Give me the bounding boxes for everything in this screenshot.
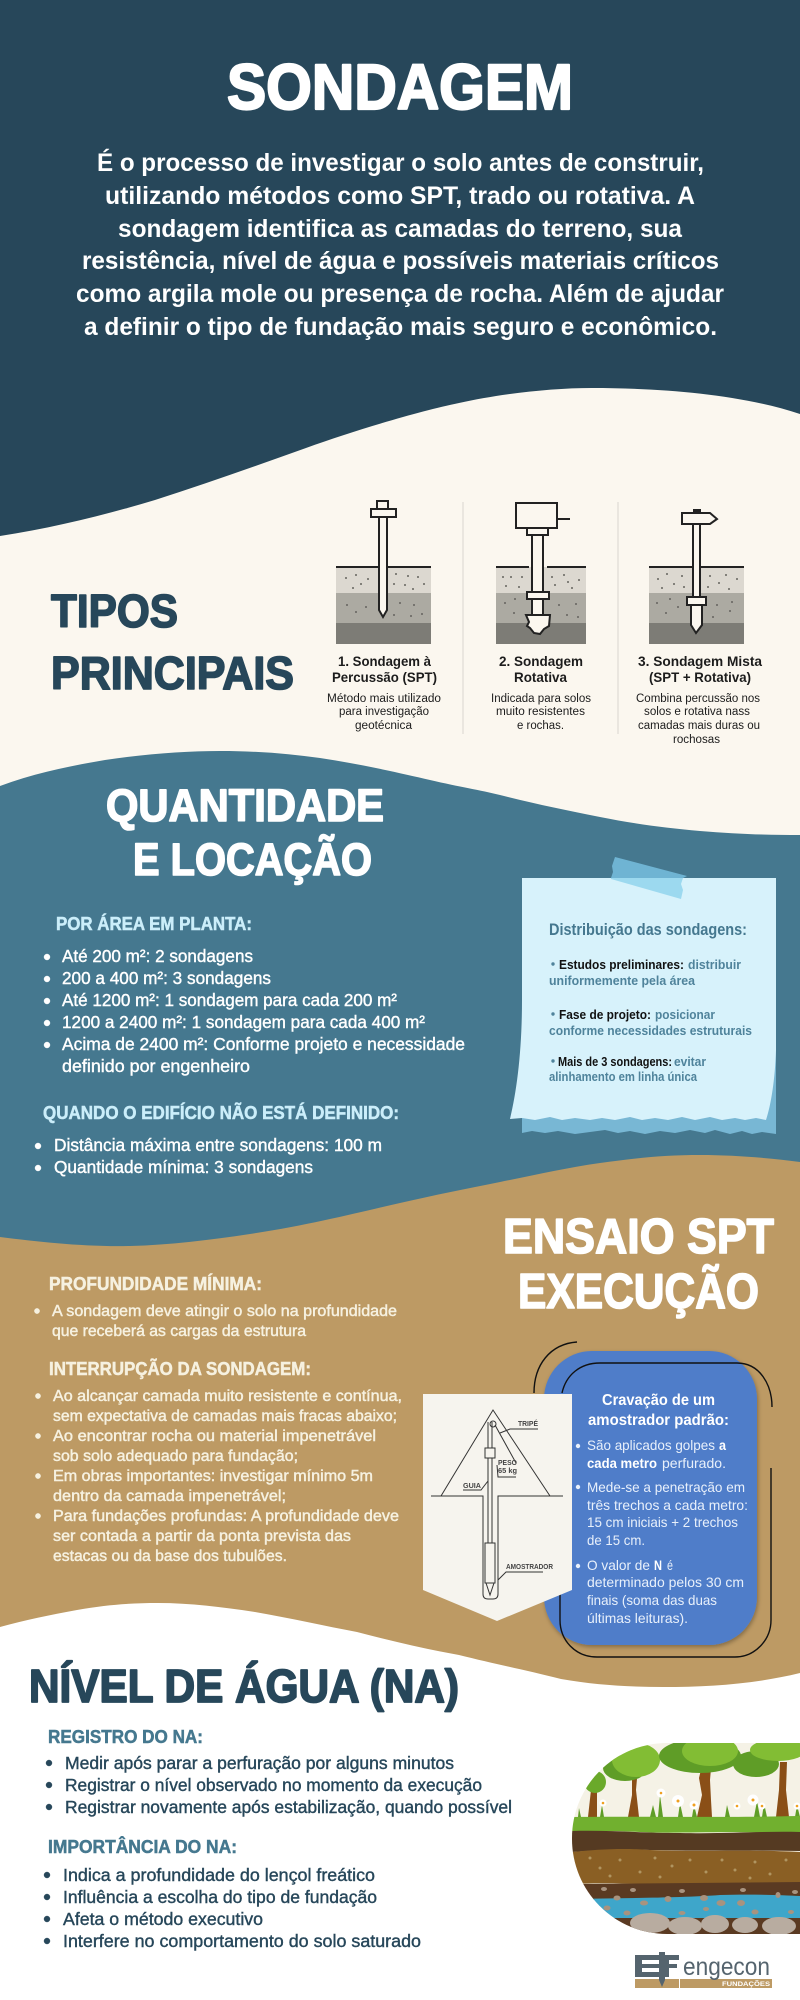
text: sondagem mista: rochosas [673,734,720,746]
list: interrupcao da sondagem: Ao encontrar rocha ou material impenetrável [53,1428,376,1445]
list: registro do na: Registrar o nível observado no momento da execução [65,1775,482,1795]
note text: uniformemente pela área [549,973,696,988]
intro text block: utilizando métodos como SPT, trado ou rotativa. A [105,182,695,210]
list: edificio nao definido [35,1135,382,1177]
list: por area em planta: Até 1200 m²: 1 sondagem para cada 200 m² [62,990,397,1010]
list: profundidade minima: A sondagem deve atingir o solo na profundidade [52,1303,397,1320]
heading: profundidade minima: PROFUNDIDADE MÍNIMA: [49,1273,262,1294]
heading: ensaio spt execucao: EXECUÇÃO [518,1265,759,1319]
list: edificio nao definido: Distância máxima entre sondagens: 100 m [54,1135,382,1155]
card list: é [667,1557,673,1573]
list: importancia do na: Indica a profundidade do lençol freático [63,1865,375,1885]
text: sondagem mista: solos e rotativa nass [644,706,750,718]
card list: N [654,1557,662,1573]
logo tagline: FUNDAÇÕES [722,1979,771,1988]
note text [549,957,752,1084]
heading: nivel de agua: NÍVEL DE ÁGUA (NA) [29,1660,459,1712]
heading: ensaio spt execucao: ENSAIO SPT [503,1210,774,1264]
card list: perfurado. [662,1455,726,1471]
text: sondagem mista: 3. Sondagem Mista [638,653,762,669]
card list: 15 cm iniciais + 2 trechos [587,1514,738,1530]
background: white wave [0,1603,800,2000]
list: por area em planta: Até 200 m²: 2 sondagens [62,946,253,966]
list: por area em planta [44,946,465,1076]
list: edificio nao definido: Quantidade mínima: 3 sondagens [54,1157,313,1177]
logo wordmark: engecon [683,1953,770,1981]
panel: tipos de sondagem [327,501,762,746]
intro text block: É o processo de investigar o solo antes de construir, [97,148,704,177]
panel: diagrama do ensaio spt [423,1394,572,1621]
list: interrupcao da sondagem [35,1388,402,1565]
list: profundidade minima: que receberá as cargas da estrutura [52,1323,306,1340]
title: SONDAGEM [227,51,573,123]
list: importancia do na: Afeta o método executivo [63,1909,263,1929]
heading: ensaio spt execucao [503,1210,774,1319]
heading: quantidade e locacao [106,780,384,885]
text: sondagem rotativa: e rochas. [517,720,564,732]
card heading: Cravação de um [602,1392,715,1409]
note text: Estudos preliminares: [559,957,684,972]
intro text block [76,148,724,341]
list: registro do na: Medir após parar a perfuração por alguns minutos [65,1753,454,1773]
list: por area em planta: 1200 a 2400 m²: 1 sondagem para cada 400 m² [62,1012,425,1032]
card list: a [719,1437,726,1453]
crowns [586,1743,800,1793]
card list: cada metro [587,1455,657,1471]
illustration: soil layers [572,1736,800,1935]
heading: por area em planta: POR ÁREA EM PLANTA: [56,913,252,934]
icon: tape [611,857,687,899]
list: interrupcao da sondagem: estacas ou da base dos tubulões. [53,1548,287,1565]
heading: importancia do na: IMPORTÂNCIA DO NA: [48,1836,237,1857]
text: sondagem rotativa [491,653,591,732]
intro text block: resistência, nível de água e possíveis materiais críticos [82,247,719,275]
list: por area em planta: definido por engenheiro [62,1056,250,1076]
text: sondagem a percussao: Percussão (SPT) [332,669,437,685]
card list: determinado pelos 30 cm [587,1574,744,1590]
list: importancia do na [44,1865,421,1951]
list: interrupcao da sondagem: sob solo adequado para fundação; [53,1448,298,1465]
list: por area em planta: 200 a 400 m²: 3 sondagens [62,968,271,988]
list: interrupcao da sondagem: dentro da camada impenetrável; [53,1488,286,1505]
intro text block: sondagem identifica as camadas do terreno, sua [118,215,683,243]
diagram labels: TRIPÉ [518,1419,538,1428]
note text: posicionar [655,1007,715,1022]
note text: alinhamento em linha única [549,1069,698,1084]
logo: engecon fundacoes [635,1952,772,1988]
list: interrupcao da sondagem: sem expectativa de camadas mais fracas abaixo; [53,1408,397,1425]
note heading: Distribuição das sondagens: [549,921,747,939]
list: interrupcao da sondagem: Em obras importantes: investigar mínimo 5m [53,1468,373,1485]
card heading [588,1392,729,1429]
text: sondagem a percussao: geotécnica [355,720,413,732]
intro text block: a definir o tipo de fundação mais seguro e econômico. [84,313,717,341]
panel: cravacao de um amostrador padrao [534,1342,772,1657]
card list: últimas leituras). [587,1610,688,1626]
text: sondagem a percussao: 1. Sondagem à [338,653,431,669]
list: por area em planta: Acima de 2400 m²: Conforme projeto e necessidade [62,1034,465,1054]
card list: Mede-se a penetração em [587,1479,745,1495]
card list: finais (soma das duas [587,1592,717,1608]
text: sondagem rotativa: muito resistentes [496,706,585,718]
list: importancia do na: Interfere no comportamento do solo saturado [63,1931,421,1951]
text: sondagem mista: (SPT + Rotativa) [649,669,751,685]
diagram labels [463,1419,553,1571]
icon: sondagem mista [649,509,744,644]
icon: sondagem rotativa [496,503,586,644]
heading: tipos principais: PRINCIPAIS [51,647,294,699]
note text: Mais de 3 sondagens: [558,1054,672,1069]
heading: tipos principais [51,585,294,699]
card list: três trechos a cada metro: [587,1497,748,1513]
diagram labels: 65 kg [498,1466,517,1475]
list: importancia do na: Influência a escolha do tipo de fundação [63,1887,377,1907]
text: sondagem rotativa: Rotativa [514,669,567,685]
heading: tipos principais: TIPOS [51,585,178,637]
icon: sondagem a percussao [336,501,431,644]
text: sondagem mista: camadas mais duras ou [638,720,760,732]
list: interrupcao da sondagem: Para fundações profundas: A profundidade deve [53,1508,399,1525]
heading: quantidade e locacao: QUANTIDADE [106,780,384,831]
text: sondagem a percussao [327,653,441,732]
diagram labels: AMOSTRADOR [506,1562,553,1571]
diagram labels: PESO [498,1458,517,1467]
list: interrupcao da sondagem: Ao alcançar camada muito resistente e contínua, [53,1388,402,1405]
heading: quando o edificio nao esta definido: QUANDO O EDIFÍCIO NÃO ESTÁ DEFINIDO: [43,1102,399,1123]
note text: distribuir [688,957,741,972]
card list: de 15 cm. [587,1532,645,1548]
note text: Fase de projeto: [559,1007,651,1022]
list: profundidade minima [34,1303,397,1340]
text: sondagem rotativa: 2. Sondagem [499,653,583,669]
background: tan wave [0,1155,800,2000]
trunks [588,1757,789,1817]
text: sondagem mista: Combina percussão nos [636,693,760,705]
card list: São aplicados golpes [587,1437,715,1453]
card list: O valor de [587,1557,650,1573]
heading: interrupcao da sondagem: INTERRUPÇÃO DA SONDAGEM: [49,1358,311,1379]
panel: nota distribuicao das sondagens [510,857,776,1134]
diagram labels: GUIA [463,1481,482,1490]
text: sondagem rotativa: Indicada para solos [491,693,591,705]
note text: evitar [674,1054,706,1069]
card heading: amostrador padrão: [588,1412,729,1429]
background: blue wave [0,751,800,2000]
text: sondagem a percussao: para investigação [339,706,429,718]
text: sondagem mista [636,653,762,746]
list: registro do na: Registrar novamente após estabilização, quando possível [65,1797,512,1817]
text: sondagem a percussao: Método mais utilizado [327,693,441,705]
list: registro do na [46,1753,512,1817]
heading: registro do na: REGISTRO DO NA: [48,1727,203,1747]
flowers [578,1795,800,1817]
intro text block: como argila mole ou presença de rocha. Além de ajudar [76,280,724,308]
card list [576,1437,748,1626]
heading: quantidade e locacao: E LOCAÇÃO [133,834,372,885]
list: interrupcao da sondagem: ser contada a partir da ponta prevista das [53,1528,351,1545]
note text: conforme necessidades estruturais [549,1023,752,1038]
